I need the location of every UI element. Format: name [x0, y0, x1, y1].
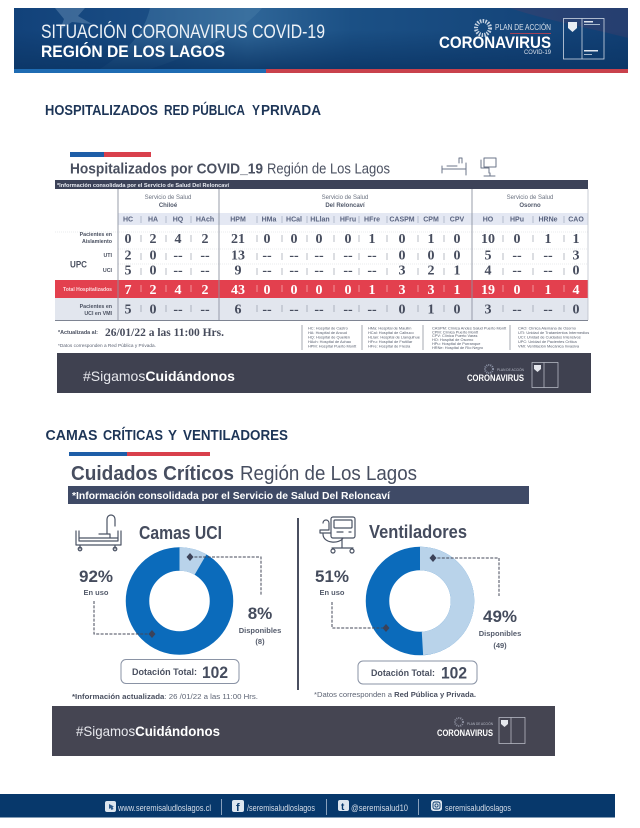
- icon: hospital bed: [442, 158, 466, 175]
- donut chart: camas UCI: [138, 559, 222, 643]
- legend: HCal: Hospital de Calbuco: [368, 330, 414, 335]
- table backgrounds: [55, 189, 588, 320]
- row: UCI: --: [262, 264, 272, 278]
- column headers: CASPM: [389, 216, 415, 224]
- banner: sigamos cuidándonos: #SigamosCuidándonos: [76, 723, 220, 739]
- banner: sigamos cuidándonos: PLAN DE ACCIÓN: [497, 367, 524, 372]
- column headers: HA: [148, 216, 158, 224]
- dotación total: ventiladores: [358, 661, 477, 684]
- camas UCI section: [72, 515, 281, 701]
- service headers: Servicio de Salud: [507, 195, 553, 201]
- footer instagram: seremisaludloslagos: [445, 803, 511, 813]
- header logo: plan de acción coronavirus: [439, 21, 552, 56]
- callout: 49% disponibles: Disponibles: [479, 629, 521, 638]
- dotación total: camas: Dotación Total:: [132, 667, 197, 677]
- legend: HFre: Hospital de Fresia: [368, 344, 411, 348]
- legend: VMI: Ventilación Mecánica Invasiva: [518, 344, 580, 348]
- legend: HC: Hospital de Castro: [308, 326, 348, 330]
- row: UCI: 3: [398, 264, 406, 278]
- row: total hospitalizados: 43: [231, 283, 245, 298]
- dotación total: ventiladores: Dotación Total:: [371, 668, 435, 678]
- header title: SITUACIÓN CORONAVIRUS COVID-19: [41, 21, 325, 43]
- row: pacientes en aislamiento: 2: [202, 232, 208, 247]
- note: información actualizada: *Información actualizada : 26 /01/22 a las 11:00 Hrs.: [72, 692, 258, 701]
- heading: hospitalizados: RED PÚBLICA: [164, 101, 245, 119]
- row labels: Pacientes en: [80, 232, 112, 238]
- header title: [41, 21, 325, 61]
- column headers: [123, 216, 584, 224]
- row: UCI: 1: [454, 264, 460, 278]
- row: UTI: --: [173, 248, 183, 264]
- row: UTI: --: [289, 248, 299, 264]
- info bar: *Información consolidada por el Servicio de Salud Del Reloncaví: [72, 490, 391, 502]
- icon: ventilator: [481, 158, 496, 176]
- row: total hospitalizados: 3: [398, 283, 406, 298]
- header banner: [14, 8, 628, 73]
- row: total hospitalizados: 7: [124, 283, 132, 298]
- row: pacientes en aislamiento: 21: [231, 232, 245, 247]
- row: pacientes en aislamiento: 1: [544, 232, 552, 247]
- info bar: [55, 180, 588, 189]
- callout: 51% en uso: [315, 567, 390, 632]
- callout: 49% disponibles: (49): [493, 641, 507, 650]
- row: UTI: 0: [454, 248, 460, 264]
- row: UTI: 0: [398, 248, 406, 264]
- row: UTI: 3: [572, 248, 580, 264]
- column headers: HC: [123, 216, 133, 224]
- service headers: Servicio de Salud: [322, 195, 368, 201]
- legend: HFru: Hospital de Frutillar: [368, 339, 413, 344]
- row: total hospitalizados: 0: [344, 283, 352, 298]
- row: UTI: 13: [231, 248, 245, 264]
- row: pacientes en aislamiento: 0: [290, 232, 298, 247]
- header ministry crest: [564, 18, 604, 59]
- row: UCI: --: [343, 264, 353, 278]
- heading: hospitalizados: HOSPITALIZADOS: [45, 103, 158, 119]
- header logo: plan de acción coronavirus: COVID-19: [524, 50, 552, 56]
- update note: [58, 325, 224, 348]
- legend: HA: Hospital de Ancud: [308, 330, 347, 335]
- column headers: CAO: [568, 216, 584, 224]
- column headers: HFru: [340, 216, 356, 224]
- info bar: *Información consolidada por el Servicio de Salud Del Reloncaví: [57, 183, 230, 189]
- legend: HO: Hospital de Osorno: [432, 337, 473, 342]
- row: total hospitalizados: 0: [514, 283, 520, 298]
- row: total hospitalizados: 2: [150, 283, 156, 298]
- row: pacientes en UCI en VMI: --: [314, 302, 324, 318]
- legend: HLlan: Hospital de Llanquihue: [368, 334, 420, 340]
- dotación total: camas: 102: [202, 663, 228, 682]
- heading: hospitalizados: PRIVADA: [261, 103, 321, 119]
- row: UCI: 0: [150, 264, 156, 278]
- column headers: HAch: [196, 216, 214, 224]
- row: UTI: --: [343, 248, 353, 264]
- row: pacientes en UCI en VMI: 1: [428, 302, 434, 318]
- row: pacientes en UCI en VMI: [124, 302, 580, 318]
- row: pacientes en UCI en VMI: --: [343, 302, 353, 318]
- column headers: HQ: [173, 216, 184, 224]
- row labels: Pacientes en: [80, 304, 112, 310]
- row: pacientes en aislamiento: 0: [124, 232, 132, 247]
- heading: hospitalizados: [45, 101, 321, 119]
- color stripe: [69, 452, 210, 456]
- footer bar: [0, 794, 615, 818]
- row: UTI: --: [543, 248, 553, 264]
- legend: CPV: Clínica Puerto Varas: [432, 333, 477, 338]
- column headers: HO: [483, 216, 494, 224]
- row: pacientes en aislamiento: 0: [454, 232, 460, 247]
- row: UCI: --: [289, 264, 299, 278]
- icon: hospital bed: [76, 515, 121, 551]
- heading: camas críticas: Y: [168, 428, 177, 444]
- header logo: plan de acción coronavirus: PLAN DE ACCIÓN: [495, 23, 551, 32]
- row: UCI: --: [173, 264, 183, 278]
- footer website: www.seremisaludloslagos.cl: [117, 803, 211, 813]
- callout: 92% en uso: [79, 567, 156, 638]
- row: UCI: 0: [572, 264, 580, 278]
- panel: cuidados críticos: [52, 452, 555, 756]
- banner: sigamos cuidándonos: #SigamosCuidándonos: [83, 368, 235, 384]
- callout: 8% disponibles: [186, 553, 281, 646]
- update note: *Actualizada al:: [58, 330, 98, 336]
- footer website: [105, 801, 211, 813]
- callout: 51% en uso: 51%: [315, 567, 349, 586]
- row: pacientes en aislamiento: 10: [481, 232, 495, 247]
- update note: *Datos corresponden a Red Pública y Privada.: [58, 343, 156, 348]
- footer instagram: [431, 800, 511, 813]
- donut chart: ventiladores: [378, 558, 462, 644]
- footer facebook: /seremisaludloslagos: [247, 803, 315, 813]
- legend: HPu: Hospital de Purranque: [432, 341, 480, 346]
- row: pacientes en UCI en VMI: 5: [124, 302, 132, 318]
- heading: hospitalizados: Y: [252, 103, 260, 119]
- row labels: Total Hospitalizados: [63, 287, 112, 293]
- row: total hospitalizados: 19: [481, 283, 495, 298]
- legend: UTI: Unidad de Tratamientos Intermedios: [518, 330, 589, 335]
- header logo: plan de acción coronavirus: CORONAVIRUS: [439, 33, 551, 52]
- column headers: HRNe: [538, 216, 558, 224]
- row: total hospitalizados: 1: [544, 283, 552, 298]
- row labels: UTI: [103, 253, 113, 259]
- row: pacientes en UCI en VMI: 3: [484, 302, 492, 318]
- footer facebook: f: [236, 802, 240, 814]
- row: UCI: 4: [484, 264, 492, 278]
- heading: camas críticas: CRÍTICAS: [103, 427, 163, 444]
- banner: sigamos cuidándonos: CORONAVIRUS: [437, 728, 493, 738]
- row: UTI: 5: [484, 248, 492, 264]
- service headers: Chiloé: [159, 203, 178, 209]
- row: UCI: [124, 264, 580, 278]
- banner: sigamos cuidándonos: [52, 706, 555, 756]
- row: UTI: 0: [150, 248, 156, 264]
- row: UCI: --: [367, 264, 377, 278]
- row: total hospitalizados: 3: [428, 283, 434, 298]
- callout: 49% disponibles: 49%: [483, 607, 517, 626]
- row: total hospitalizados: 4: [174, 283, 182, 298]
- legend: CASPM: Clínica Andes Salud Puerto Montt: [432, 326, 507, 330]
- row labels: UCI: [103, 268, 113, 274]
- row: UTI: --: [200, 248, 210, 264]
- table title: Hospitalizados por COVID_19: [70, 160, 263, 178]
- row: total hospitalizados: 2: [202, 283, 208, 298]
- banner: sigamos cuidándonos: [57, 353, 591, 393]
- row: total hospitalizados: 0: [290, 283, 298, 298]
- row: pacientes en aislamiento: 0: [514, 232, 520, 247]
- row: UCI: 2: [428, 264, 434, 278]
- callout: 49% disponibles: [430, 554, 521, 650]
- column headers: HFre: [364, 216, 380, 224]
- row: pacientes en UCI en VMI: 6: [234, 302, 242, 318]
- legend: HAch: Hospital de Achao: [308, 339, 351, 344]
- row: pacientes en aislamiento: 2: [150, 232, 156, 247]
- legend: HQ: Hospital de Queilén: [308, 334, 350, 340]
- dotación total: camas: [121, 660, 239, 684]
- column headers: HCal: [286, 216, 302, 224]
- column headers: HLlan: [310, 216, 330, 224]
- row: UTI: --: [262, 248, 272, 264]
- table title: Región de Los Lagos: [267, 160, 390, 178]
- callout: 8% disponibles: (8): [255, 637, 265, 646]
- dotación total: ventiladores: 102: [441, 664, 467, 682]
- header title: REGIÓN DE LOS LAGOS: [41, 42, 225, 61]
- row: pacientes en UCI en VMI: --: [367, 302, 377, 318]
- footer twitter: [338, 800, 408, 813]
- row: total hospitalizados: 0: [264, 283, 270, 298]
- row labels: UCI en VMI: [84, 311, 113, 317]
- banner: sigamos cuidándonos: CORONAVIRUS: [467, 373, 524, 383]
- icon: ventilator: [320, 517, 355, 553]
- row: total hospitalizados: 0: [316, 283, 322, 298]
- row: pacientes en aislamiento: 0: [316, 232, 322, 247]
- legend: HRNe: Hospital de Río Negro: [432, 345, 483, 350]
- row labels: UPC: [70, 260, 87, 270]
- legend: UCI: Unidad de Cuidados Intensivos: [518, 334, 581, 340]
- row: UCI: --: [200, 264, 210, 278]
- callout: 8% disponibles: 8%: [248, 604, 272, 623]
- row: UCI: --: [314, 264, 324, 278]
- heading: camas críticas: [46, 427, 288, 444]
- callout: 51% en uso: En uso: [319, 588, 345, 597]
- ventiladores title: Ventiladores: [369, 521, 467, 542]
- footer twitter: t: [341, 802, 345, 813]
- legend: HPM: Hospital Puerto Montt: [308, 344, 357, 348]
- row: pacientes en aislamiento: 1: [368, 232, 376, 247]
- row: pacientes en UCI en VMI: --: [200, 302, 210, 318]
- row: pacientes en aislamiento: 0: [344, 232, 352, 247]
- row: pacientes en UCI en VMI: 0: [150, 302, 156, 318]
- heading: camas críticas: VENTILADORES: [183, 428, 288, 444]
- column headers: HMa: [262, 216, 276, 224]
- row: pacientes en aislamiento: 0: [264, 232, 270, 247]
- panel title: [71, 462, 417, 485]
- row: pacientes en UCI en VMI: --: [173, 302, 183, 318]
- row: UTI: --: [314, 248, 324, 264]
- service headers: Del Reloncaví: [325, 203, 365, 209]
- row: UTI: [124, 248, 580, 264]
- row: pacientes en UCI en VMI: --: [512, 302, 522, 318]
- service headers: [145, 195, 553, 209]
- column headers: HPM: [230, 216, 246, 224]
- panel title: Cuidados Críticos: [71, 462, 234, 485]
- row: pacientes en UCI en VMI: 0: [454, 302, 460, 318]
- legend: HMa: Hospital de Maullín: [368, 326, 411, 330]
- row: pacientes en UCI en VMI: --: [262, 302, 272, 318]
- legend: CAO: Clínica Alemana de Osorno: [518, 326, 576, 330]
- legend: CPM: Clínica Puerto Montt: [432, 330, 479, 334]
- row: UTI: 0: [428, 248, 434, 264]
- panel title: Región de Los Lagos: [240, 462, 417, 485]
- row: UCI: 9: [234, 264, 242, 278]
- row: pacientes en aislamiento: 4: [174, 232, 182, 247]
- row: pacientes en aislamiento: 0: [398, 232, 406, 247]
- camas UCI title: Camas UCI: [139, 522, 222, 543]
- row: UTI: --: [367, 248, 377, 264]
- service headers: Osorno: [519, 203, 541, 209]
- update note: 26/01/22 a las 11:00 Hrs.: [105, 325, 224, 339]
- panel: hospitalizados table: [55, 152, 591, 393]
- row: total hospitalizados: 4: [572, 283, 580, 298]
- row: pacientes en UCI en VMI: --: [289, 302, 299, 318]
- divider: [297, 518, 299, 690]
- service headers: Servicio de Salud: [145, 195, 191, 201]
- footer twitter: @seremisalud10: [351, 803, 408, 813]
- row: total hospitalizados: 1: [368, 283, 376, 298]
- row: pacientes en UCI en VMI: 0: [572, 302, 580, 318]
- color stripe: [70, 152, 151, 157]
- legend: [302, 325, 589, 350]
- row: UCI: 5: [124, 264, 132, 278]
- callout: 92% en uso: En uso: [83, 588, 109, 597]
- row: pacientes en aislamiento: 1: [428, 232, 434, 247]
- heading: camas críticas: CAMAS: [46, 428, 98, 444]
- row: total hospitalizados: [124, 283, 580, 298]
- row labels: [63, 232, 113, 317]
- row: total hospitalizados: 1: [454, 283, 460, 298]
- info bar: [68, 486, 529, 504]
- callout: 92% en uso: 92%: [79, 567, 113, 586]
- legend: UPC: Unidad de Pacientes Crítica: [518, 339, 577, 344]
- row: UCI: --: [543, 264, 553, 278]
- row: UTI: 2: [124, 248, 132, 264]
- row: pacientes en aislamiento: 1: [572, 232, 580, 247]
- row: pacientes en UCI en VMI: --: [543, 302, 553, 318]
- row: UCI: --: [512, 264, 522, 278]
- note: datos corresponden: *Datos corresponden a Red Pública y Privada.: [314, 690, 476, 699]
- ventiladores section: [314, 517, 521, 699]
- column headers: CPV: [450, 216, 465, 224]
- column headers: CPM: [423, 216, 439, 224]
- column headers: HPu: [510, 216, 524, 224]
- row: UTI: --: [512, 248, 522, 264]
- banner: sigamos cuidándonos: PLAN DE ACCIÓN: [467, 721, 493, 726]
- row: pacientes en aislamiento: [124, 232, 580, 247]
- row: pacientes en UCI en VMI: 0: [398, 302, 406, 318]
- callout: 8% disponibles: Disponibles: [239, 626, 281, 635]
- row labels: Aislamiento: [82, 239, 113, 245]
- footer facebook: [232, 800, 315, 814]
- table title: [70, 160, 390, 178]
